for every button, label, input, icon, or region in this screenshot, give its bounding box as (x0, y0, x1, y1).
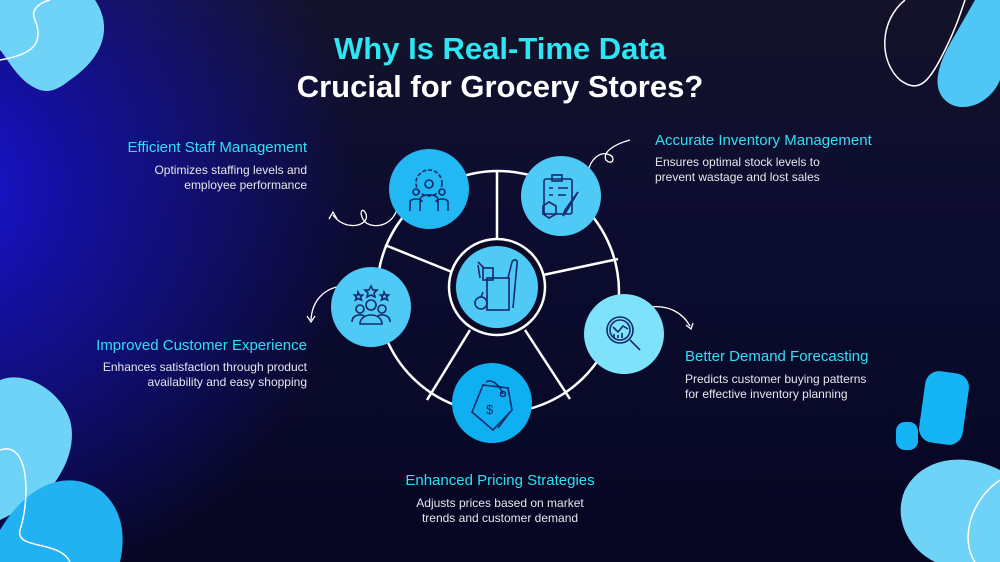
text: prevent wastage and lost sales (655, 170, 820, 184)
text: Enhanced Pricing Strategies (405, 472, 595, 489)
text: better demand forecasting (685, 348, 868, 401)
title: Why Is Real-Time Data (334, 31, 666, 66)
icon: inventory (521, 156, 601, 236)
icon: pricing (452, 363, 532, 443)
arrows (307, 140, 693, 329)
icon: pricing: $ (486, 402, 494, 417)
text: Enhances satisfaction through product (103, 360, 307, 374)
blob: bottom-right (896, 369, 1000, 562)
text: Adjusts prices based on market (416, 496, 584, 510)
text: trends and customer demand (422, 511, 578, 525)
icon: demand forecasting (584, 294, 664, 374)
blob: bottom-left (0, 377, 123, 562)
icon: customer experience (331, 267, 411, 347)
text: availability and easy shopping (148, 375, 307, 389)
text: Optimizes staffing levels and (154, 163, 307, 177)
blob: top-left (0, 0, 104, 91)
text: Better Demand Forecasting (685, 348, 868, 365)
center circle (456, 246, 538, 328)
text: Improved Customer Experience (96, 337, 307, 354)
text: improved customer experience (96, 337, 307, 389)
text: efficient staff management (127, 139, 307, 192)
icon: staff management (389, 149, 469, 229)
text: accurate inventory management (655, 132, 872, 184)
title: Crucial for Grocery Stores? (297, 69, 703, 104)
text: Ensures optimal stock levels to (655, 155, 820, 169)
title (297, 31, 703, 104)
text: Accurate Inventory Management (655, 132, 872, 149)
text: for effective inventory planning (685, 387, 848, 401)
text: Efficient Staff Management (127, 139, 307, 156)
text: enhanced pricing strategies (405, 472, 595, 525)
text: employee performance (184, 178, 307, 192)
text: Predicts customer buying patterns (685, 372, 866, 386)
blob: top-right (885, 0, 1000, 107)
